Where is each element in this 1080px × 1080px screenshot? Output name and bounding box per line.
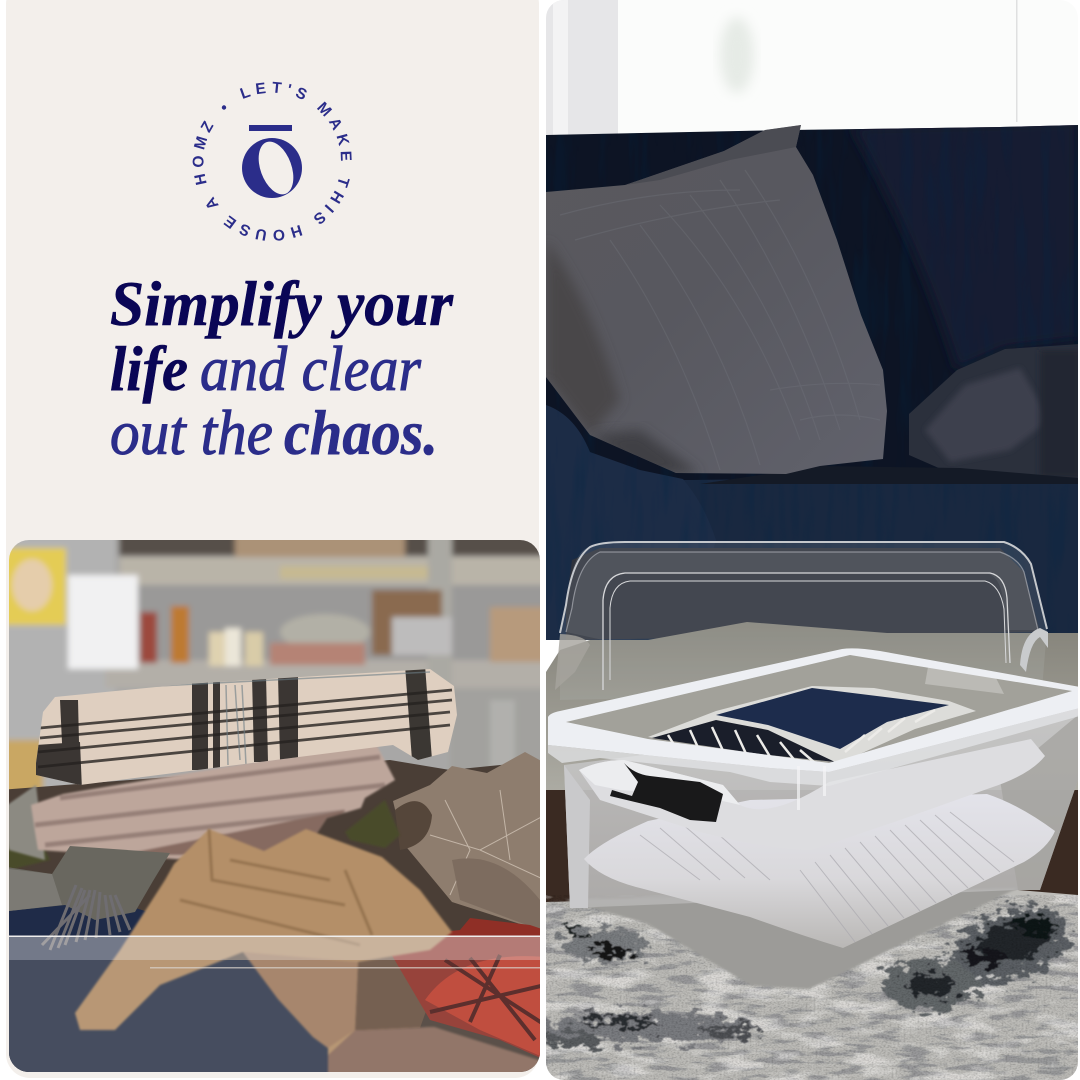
bright window	[546, 0, 1078, 140]
logo: macron bar	[249, 125, 292, 131]
wall behind bin	[546, 622, 1080, 800]
patterned rug	[540, 890, 1079, 1080]
logo: circular slogan text: LET'S MAKE THIS HOUSE A HOMZ	[192, 82, 352, 241]
small fluffy cushion	[909, 344, 1080, 478]
bin lid standing behind	[555, 542, 1048, 700]
bin handle cutout	[610, 763, 723, 822]
navy denim inside bin	[9, 905, 225, 1072]
headline: chaos.	[284, 398, 438, 468]
sofa folds and seat	[546, 120, 1078, 680]
dark seat seam	[700, 466, 1078, 484]
headline	[110, 269, 453, 468]
clear bin rim	[0, 936, 550, 1080]
headline: out the	[110, 398, 273, 468]
tan wrinkled shirt	[75, 829, 545, 1080]
rug texture grain	[546, 895, 1078, 1080]
dim sofa seen through lid	[566, 548, 1040, 640]
bin body	[564, 700, 1078, 908]
taupe checked throw	[393, 752, 545, 932]
far bin handle	[925, 667, 1004, 694]
bin rim and front wall	[548, 648, 1080, 810]
dark shadow base behind pile	[0, 760, 550, 1080]
rug dark mottling	[546, 895, 1078, 1080]
lower white pillow	[584, 794, 1055, 948]
headline: Simplify your	[110, 269, 453, 339]
top plaid blanket	[36, 665, 457, 790]
plant shadow in window	[720, 17, 754, 93]
rug black splotches	[540, 894, 1079, 1048]
blurred pantry shelves background	[0, 530, 550, 1080]
left folded fringe	[9, 784, 46, 861]
photo: sofa and storage bin	[540, 0, 1080, 1080]
stacked tan check blankets	[31, 742, 395, 860]
large grey cushion	[546, 125, 887, 474]
window frame line	[1016, 0, 1018, 122]
rug light mottling	[546, 895, 1078, 1080]
logo: letter o mark	[242, 137, 302, 199]
navy patterned throw	[648, 686, 976, 763]
translucent navy below rim	[0, 960, 330, 1080]
upper white pillow in bin	[579, 739, 1045, 850]
red plaid fabric	[392, 918, 540, 1058]
curtain	[546, 0, 618, 135]
photo: blankets in clear storage bin	[0, 530, 550, 1080]
headline: life	[110, 334, 188, 404]
headline: and clear	[200, 334, 421, 404]
olive fringe	[0, 800, 400, 870]
logo badge	[192, 82, 352, 241]
rug cast shadow	[565, 888, 1018, 989]
logo: dot separator	[222, 105, 226, 110]
wine shadow inside bin	[354, 956, 426, 1030]
grey knit with fringe	[0, 846, 170, 950]
bin interior	[566, 655, 1072, 763]
panel: cream background	[6, 0, 539, 1078]
dark wood floor	[546, 790, 1078, 910]
navy sofa back	[546, 125, 1078, 480]
